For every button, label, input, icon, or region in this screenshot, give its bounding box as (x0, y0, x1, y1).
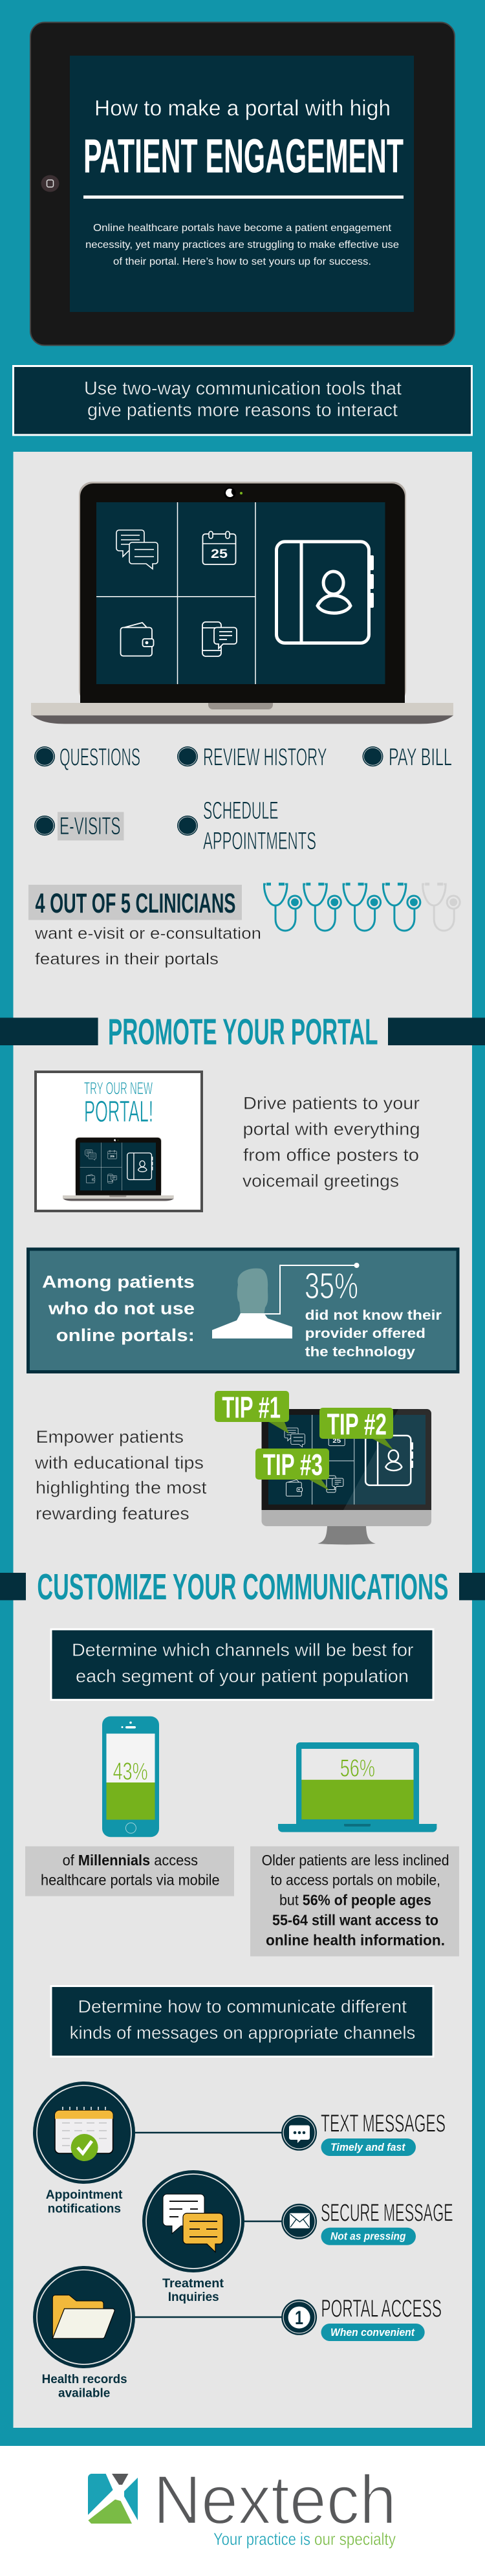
logo: Nextech: Your practice is (213, 2529, 310, 2549)
text: drive patients: voicemail greetings (242, 1171, 399, 1191)
icon: wallet (120, 623, 154, 656)
banner: message kinds: Determine how to communicate different (78, 1997, 407, 2017)
poster: PORTAL! (84, 1094, 153, 1128)
feature: schedule appointments: APPOINTMENTS (203, 828, 316, 855)
text: older patients: to access portals on mobile, (270, 1871, 440, 1888)
banner: message kinds: kinds of messages on appropriate channels (70, 2023, 415, 2043)
channel: text messages (281, 2110, 446, 2156)
stat text (305, 1308, 442, 1359)
stat text: the technology (305, 1345, 415, 1359)
lead text: online portals: (56, 1326, 195, 1345)
intro text: of their portal. Here’s how to set yours up for success. (113, 256, 371, 267)
feature: pay bill (362, 744, 452, 771)
banner: channels (51, 1629, 433, 1700)
icon: logo mark (88, 2474, 138, 2524)
clinicians stat (28, 885, 261, 968)
text: empower patients: highlighting the most (36, 1478, 207, 1498)
icon: message bubble (289, 2126, 310, 2143)
icon: person silhouette (212, 1269, 292, 1338)
text: older patients: online health information. (266, 1932, 445, 1949)
feature: schedule appointments (177, 797, 316, 855)
callout: tip 2 (319, 1408, 393, 1450)
callout: tip 3 (255, 1448, 329, 1491)
text: older patients (250, 1847, 459, 1957)
node: treatment inquiries: Inquiries (168, 2291, 219, 2304)
title intro: How to make a portal with high (94, 96, 391, 121)
monitor with tips (215, 1391, 431, 1544)
text: older patients: Older patients are less inclined (262, 1852, 449, 1869)
icon: laptop 56% (278, 1742, 436, 1832)
node: health records: Health records (42, 2373, 127, 2386)
tablet header (30, 22, 455, 346)
panel: 35% stat (28, 1249, 458, 1372)
feature list (34, 744, 452, 855)
lead text: who do not use (48, 1299, 195, 1318)
text: older patients: but 56% of people ages (279, 1891, 431, 1908)
laptop with portal screen (31, 482, 453, 724)
channel: secure message (281, 2199, 453, 2245)
icon: calendar (203, 531, 235, 564)
poster: TRY OUR NEW (84, 1079, 153, 1098)
clinicians stat: want e-visit or e-consultation (34, 925, 261, 943)
banner: channels: each segment of your patient population (76, 1666, 409, 1686)
callout: tip 1 (215, 1391, 289, 1434)
banner: two-way communication (13, 366, 472, 435)
feature: questions: QUESTIONS (59, 744, 140, 771)
icon: phone 43%: 43% (113, 1758, 148, 1785)
banner: two-way communication: give patients more reasons to interact (87, 400, 398, 421)
channel: text messages: Timely and fast (330, 2142, 406, 2153)
feature: schedule appointments: SCHEDULE (203, 797, 278, 825)
text: millennials: healthcare portals via mobile (41, 1871, 220, 1888)
clinicians stat: 4 OUT OF 5 CLINICIANS (35, 888, 235, 919)
node: appointment notifications: notifications (48, 2202, 121, 2215)
banner: two-way communication: Use two-way communication tools that (84, 378, 402, 399)
icon: phone 43% (102, 1716, 159, 1837)
icon: address book (277, 542, 374, 643)
feature: review history (177, 744, 327, 771)
icon: chat bubbles (116, 530, 158, 569)
icon: laptop 56%: 56% (340, 1755, 375, 1782)
intro text: necessity, yet many practices are struggling to make effective use (85, 239, 399, 250)
node: appointment notifications (33, 2082, 135, 2215)
poster (36, 1072, 202, 1211)
channel: portal access (281, 2296, 442, 2341)
callout: tip 1: TIP #1 (222, 1391, 281, 1425)
text: drive patients: from office posters to (243, 1146, 419, 1165)
text: empower patients (34, 1427, 207, 1524)
text: empower patients: with educational tips (34, 1453, 204, 1472)
channel: secure message: Not as pressing (330, 2231, 406, 2243)
channel: portal access: When convenient (330, 2327, 415, 2338)
logo: Nextech (88, 2461, 396, 2549)
feature: e-visits: E-VISITS (59, 813, 120, 840)
node: health records: available (58, 2387, 110, 2400)
node: appointment notifications: Appointment (46, 2188, 123, 2202)
intro text: Online healthcare portals have become a patient engagement (93, 223, 392, 234)
icon: chat bubbles colour (163, 2194, 223, 2252)
feature: e-visits (34, 813, 120, 840)
banner: message kinds (51, 1986, 433, 2057)
logo: Nextech: our specialty (314, 2529, 396, 2549)
text: older patients: 55-64 still want access to (272, 1912, 438, 1929)
text: empower patients: rewarding features (36, 1504, 189, 1524)
icon: envelope (290, 2213, 310, 2228)
text: millennials (25, 1847, 234, 1896)
stat text: provider offered (305, 1326, 426, 1341)
icon: phone message (202, 622, 237, 656)
clinicians stat: features in their portals (35, 950, 219, 968)
logo: Nextech: Nextech (153, 2461, 396, 2538)
stethoscope pictogram: 4 of 5 (264, 884, 460, 931)
text: empower patients: Empower patients (36, 1427, 184, 1447)
text: drive patients: Drive patients to your (243, 1094, 420, 1113)
stat text: did not know their (305, 1308, 442, 1323)
icon: calendar: 25 (211, 548, 228, 561)
callout: tip 2: TIP #2 (327, 1408, 387, 1441)
node: treatment inquiries: Treatment (162, 2277, 224, 2291)
intro text (85, 223, 399, 267)
lead text (42, 1272, 195, 1345)
node: treatment inquiries (142, 2170, 244, 2304)
text: drive patients (242, 1094, 420, 1191)
lead text: Among patients (42, 1272, 195, 1291)
text: millennials: of Millennials access (63, 1852, 198, 1869)
channel: portal access: 1 (295, 2307, 303, 2329)
text: drive patients: portal with everything (243, 1120, 420, 1139)
feature: questions (34, 744, 140, 771)
feature: review history: REVIEW HISTORY (203, 744, 327, 771)
banner: channels: Determine which channels will be best for (72, 1639, 414, 1660)
icon: calendar check (55, 2107, 113, 2161)
stat value: 35% (305, 1265, 358, 1307)
node: health records (33, 2266, 135, 2400)
icon: folder (52, 2295, 114, 2338)
callout: tip 3: TIP #3 (263, 1448, 323, 1482)
